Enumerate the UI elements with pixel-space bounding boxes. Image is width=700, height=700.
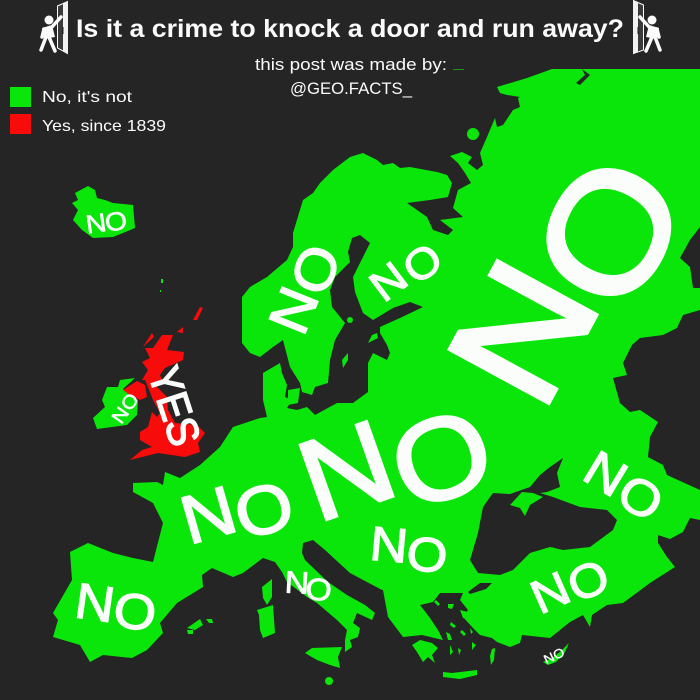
icon: person knocking on door, right bbox=[633, 0, 660, 54]
aegean islands bbox=[434, 600, 495, 665]
mainland Europe bbox=[53, 69, 700, 662]
cyprus bbox=[543, 643, 569, 665]
legend label: yes: Yes, since 1839 bbox=[42, 118, 166, 135]
legend bbox=[10, 87, 166, 135]
label: Iceland NO: NO bbox=[84, 204, 129, 240]
black sea bbox=[470, 458, 617, 575]
map: seas cut into the land bbox=[468, 69, 617, 594]
label: Finland NO: NO bbox=[360, 228, 452, 316]
northern ireland bbox=[123, 381, 147, 400]
subtitle: handle: @GEO.FACTS_ bbox=[290, 80, 413, 98]
legend swatch: no bbox=[10, 87, 31, 107]
label: UK YES: YES bbox=[138, 361, 210, 452]
legend swatch: yes bbox=[10, 114, 31, 134]
aland bbox=[347, 317, 353, 323]
gotland bbox=[342, 353, 348, 368]
peloponnese bbox=[412, 640, 438, 663]
great britain bbox=[130, 335, 205, 460]
sea of marmara bbox=[468, 583, 492, 594]
label: Caucasus NO: NO bbox=[573, 441, 674, 533]
label: Turkey NO: NO bbox=[523, 545, 617, 629]
label: Balkans NO: NO bbox=[367, 517, 450, 583]
label: France NO: NO bbox=[172, 456, 302, 570]
kanin bay bbox=[576, 69, 590, 85]
sicily bbox=[305, 647, 342, 668]
title: Is it a crime to knock a door and run away? bbox=[76, 15, 624, 43]
icon: person knocking on door, left bbox=[41, 1, 68, 54]
ireland bbox=[93, 378, 138, 429]
zealand bbox=[288, 388, 300, 405]
small underscore mark bbox=[453, 69, 464, 70]
crimea bbox=[510, 492, 543, 516]
iceland bbox=[72, 186, 135, 238]
kolguev island bbox=[467, 128, 479, 140]
label: Norway NO: NO bbox=[257, 234, 354, 344]
sardinia bbox=[257, 605, 275, 638]
subtitle: credit line: this post was made by: bbox=[255, 56, 447, 74]
united kingdom bbox=[123, 307, 205, 460]
hebrides bbox=[139, 333, 154, 353]
corsica bbox=[262, 579, 272, 605]
orkney bbox=[177, 327, 183, 333]
faroe islands bbox=[160, 279, 163, 292]
label: Italy NO: NO bbox=[284, 565, 333, 608]
label: central Europe NO: NO bbox=[283, 363, 509, 566]
legend label: no: No, it's not bbox=[42, 89, 133, 106]
label: Spain NO: NO bbox=[71, 573, 160, 643]
label: Ireland NO: NO bbox=[108, 390, 143, 428]
shetland bbox=[193, 307, 203, 320]
label: Cyprus NO: NO bbox=[541, 645, 567, 667]
crete bbox=[443, 670, 477, 679]
malta bbox=[325, 677, 333, 685]
balearic islands bbox=[187, 619, 203, 630]
saaremaa bbox=[368, 333, 378, 343]
